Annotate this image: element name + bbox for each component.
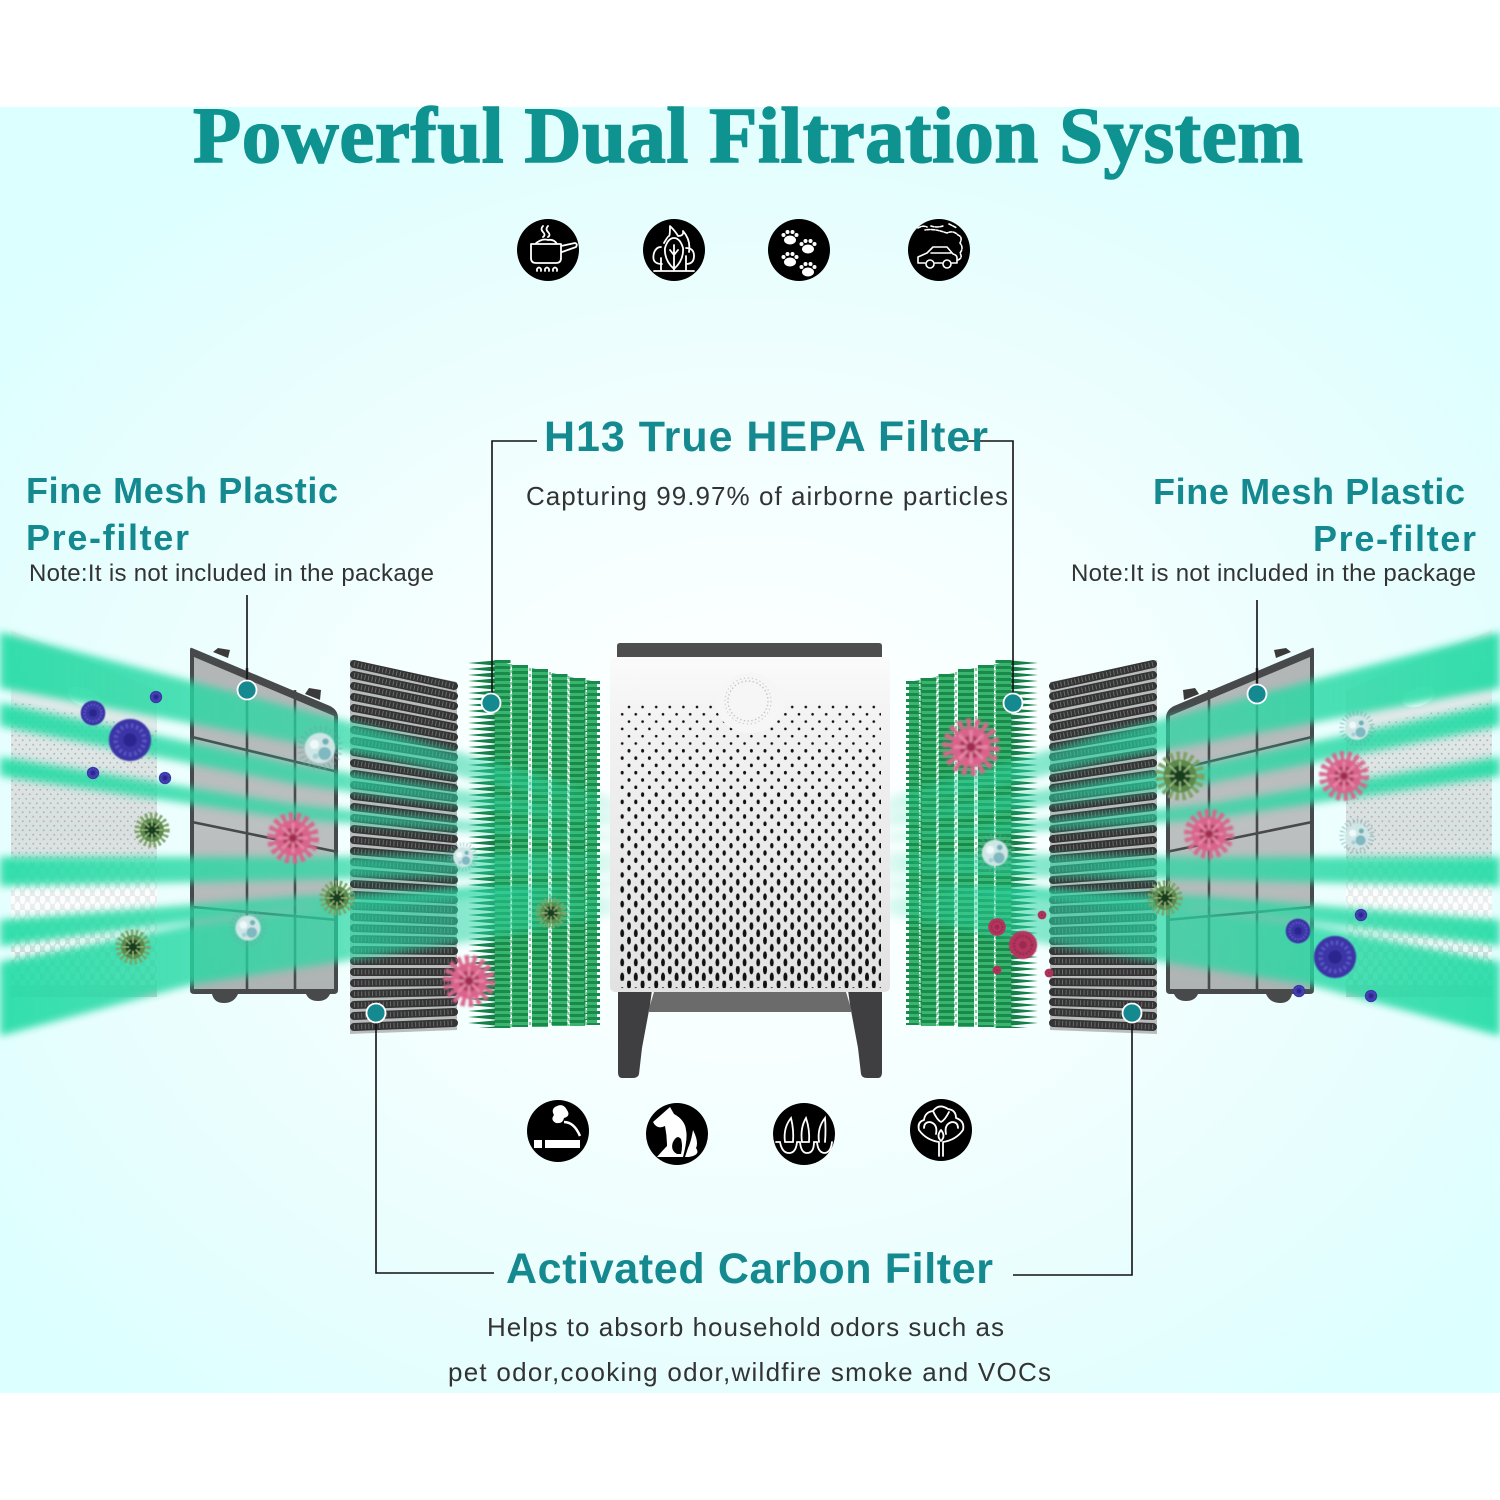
virus: pink	[949, 725, 993, 769]
virus: green	[139, 817, 165, 843]
left carbon filter	[350, 660, 457, 1034]
icon: cotton boll	[910, 1099, 972, 1161]
purifier lid	[617, 643, 882, 657]
purifier unit	[610, 643, 890, 1078]
virus: small blue	[1293, 985, 1305, 997]
icon: cooking pot	[517, 219, 579, 281]
left pre-filter	[190, 648, 338, 1003]
right pathogens	[949, 713, 1377, 1002]
icon: car exhaust smoke	[908, 219, 970, 281]
text: right note: Note:It is not included in the package	[1071, 560, 1476, 587]
heading: H13 True HEPA Filter: H13 True HEPA Filter	[544, 413, 988, 461]
virus: small blue	[1365, 990, 1377, 1002]
virus: pink	[450, 962, 488, 1000]
virus: pale	[301, 729, 339, 767]
icon: dog and cat	[646, 1103, 708, 1165]
virus: red	[1009, 931, 1037, 959]
right airflow beams	[880, 632, 1500, 1036]
virus: small blue	[159, 772, 171, 784]
text: carbon description: Helps to absorb household odors such as	[487, 1312, 1004, 1342]
virus: pale	[978, 836, 1012, 870]
HEPA spiked edge	[468, 660, 496, 1028]
leader lines	[247, 441, 1257, 1275]
heading: right pre-filter	[1153, 471, 1476, 559]
virus: blue	[109, 719, 151, 761]
heading: left pre-filter	[26, 470, 338, 558]
heading: left pre-filter: Fine Mesh Plastic	[26, 470, 338, 511]
text: HEPA description: Capturing 99.97% of airborne particles	[526, 481, 1008, 511]
callout markers	[238, 680, 1266, 1022]
left faded outer panel	[11, 630, 157, 997]
text: left note: Note:It is not included in the package	[29, 560, 434, 587]
left pathogens	[81, 691, 563, 1000]
virus: pale	[232, 912, 264, 944]
virus: pink	[1190, 815, 1228, 853]
purifier tray	[648, 992, 852, 1012]
text: carbon description	[448, 1312, 1051, 1387]
left HEPA filter	[468, 660, 597, 1028]
virus: green	[539, 901, 563, 925]
heading: right pre-filter: Pre-filter	[1313, 518, 1476, 559]
virus: pale	[1342, 713, 1372, 743]
heading: left pre-filter: Pre-filter	[26, 517, 189, 558]
virus: small red	[1038, 911, 1046, 919]
perforated grille	[619, 703, 881, 988]
virus: green	[1162, 758, 1198, 794]
purifier body	[610, 657, 890, 992]
virus: pale	[1342, 821, 1372, 851]
top icon row	[517, 219, 970, 281]
icon: hair follicles	[773, 1103, 835, 1165]
virus: blue	[81, 701, 105, 725]
right faded outer panel	[1346, 630, 1492, 997]
virus: blue	[1314, 936, 1356, 978]
left airflow beams	[0, 632, 620, 1036]
heading: Activated Carbon Filter: Activated Carbon Filter	[506, 1245, 993, 1293]
virus: blue	[1286, 919, 1310, 943]
text: carbon description: pet odor,cooking odor,wildfire smoke and VOCs	[448, 1357, 1051, 1387]
virus: green	[120, 934, 146, 960]
title: Powerful Dual Filtration System	[193, 93, 1303, 180]
icon: cigarette smoke	[527, 1100, 589, 1162]
virus: green	[1152, 885, 1178, 911]
purifier legs	[618, 990, 882, 1078]
virus: small blue	[1355, 909, 1367, 921]
HEPA pleats	[495, 660, 597, 1028]
virus: pale	[450, 844, 476, 870]
right pre-filter	[1166, 648, 1314, 1003]
bottom icon row	[527, 1099, 972, 1165]
virus: small blue	[87, 767, 99, 779]
sensor ring	[716, 673, 784, 733]
virus: small red	[993, 966, 1001, 974]
virus: green	[324, 885, 350, 911]
virus: red	[988, 918, 1006, 936]
virus: pink	[274, 819, 312, 857]
right carbon filter	[1050, 660, 1157, 1034]
virus: small blue	[150, 691, 162, 703]
right HEPA filter	[909, 660, 1038, 1028]
virus: pink	[1325, 757, 1363, 795]
virus: small red	[1045, 969, 1053, 977]
icon: paw prints	[768, 219, 830, 281]
heading: right pre-filter: Fine Mesh Plastic	[1153, 471, 1465, 512]
icon: wildfire trees	[643, 219, 705, 281]
